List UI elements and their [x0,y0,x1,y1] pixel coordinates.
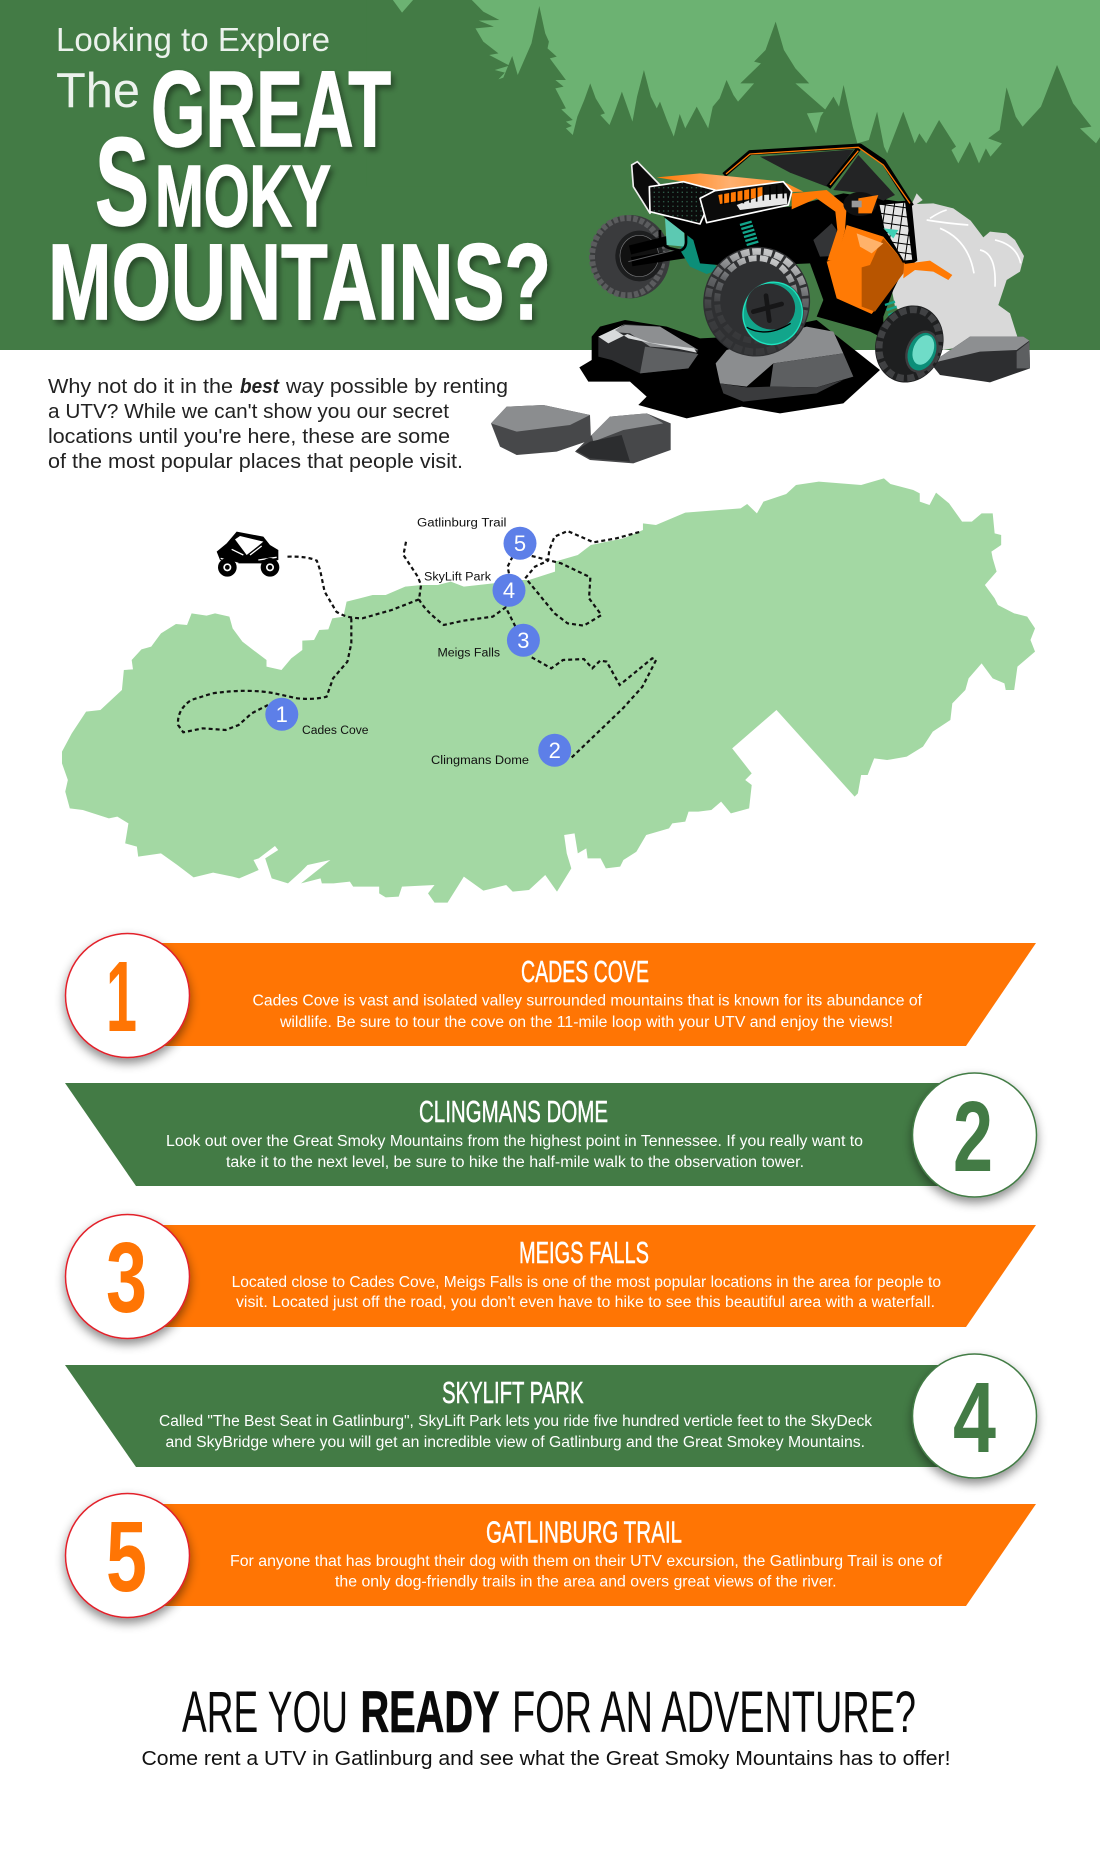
title kicker: Looking to Explore [56,21,330,58]
description [166,1133,863,1171]
intro paragraph: of the most popular places that people visit. [48,450,463,473]
map pin 1 [265,698,298,731]
center rock [716,327,853,402]
forest sky [392,0,1100,180]
title word: The: The [56,64,140,118]
description: For anyone that has brought their dog with them on their UTV excursion, the Gatlinburg Trail is one of [230,1553,943,1570]
cage mesh [878,202,913,262]
title main: MOUNTAINS? [48,221,551,342]
title [48,21,551,342]
panel: Gatlinburg Trail [66,1494,1036,1618]
intro paragraph: way possible by renting [285,375,508,398]
intro paragraph: best [240,375,280,398]
map label: Meigs Falls: Meigs Falls [438,648,500,660]
rear-left wheel [590,215,687,298]
map pin 5 [504,527,536,560]
orange door [827,225,905,314]
map pin 3 [507,624,540,657]
map pin 3: 3 [517,628,530,653]
left rock [598,324,698,373]
banner shape [150,1504,1036,1606]
number badge [912,1354,1036,1478]
banner shape [150,1225,1036,1327]
roll cage [724,146,912,206]
map label: SkyLift Park: SkyLift Park [424,572,491,584]
intro paragraph [48,375,508,473]
number badge [66,1214,190,1338]
forest tree silhouette [366,0,1100,187]
rock shadow [579,320,880,418]
number badge: 3 [106,1222,147,1334]
heading: CLINGMANS DOME [419,1094,608,1129]
title main [48,48,551,342]
panel: Clingmans Dome [65,1073,1036,1197]
number badge: 5 [106,1501,147,1613]
front coil spring [740,222,758,245]
panel: Cades Cove [66,934,1036,1058]
panel: Meigs Falls [66,1214,1036,1338]
number badge: 1 [106,941,137,1053]
description: wildlife. Be sure to tour the cove on the 11-mile loop with your UTV and enjoy the views! [279,1014,893,1031]
banner shape [65,1083,960,1186]
map of park [62,478,1035,903]
closing headline [182,1680,916,1745]
map label: Gatlinburg Trail: Gatlinburg Trail [417,518,506,530]
title main: S [95,113,149,252]
teal suspension [665,218,718,274]
rear coil spring [885,302,900,320]
number badge [912,1073,1036,1197]
description [232,1274,941,1311]
small rock left [491,405,591,455]
description: and SkyBridge where you will get an incredible view of Gatlinburg and the Great Smokey Mountains. [166,1434,865,1451]
header background [0,0,1100,350]
intro paragraph: a UTV? While we can't show you our secret [48,400,449,423]
map pin 2: 2 [549,738,561,763]
closing headline: ARE YOU [182,1680,348,1745]
closing subline: Come rent a UTV in Gatlinburg and see what the Great Smoky Mountains has to offer! [142,1747,950,1770]
description: Look out over the Great Smoky Mountains from the highest point in Tennessee. If you really want to [166,1133,863,1150]
description: the only dog-friendly trails in the area and overs great views of the river. [335,1574,836,1590]
description: visit. Located just off the road, you don't even have to hike to see this beautiful area with a waterfall. [236,1294,935,1311]
map pin 1: 1 [276,702,288,727]
number badge: 2 [953,1081,993,1193]
description: Located close to Cades Cove, Meigs Falls is one of the most popular locations in the area for people to [232,1274,941,1291]
hood [657,173,803,193]
right rock [931,337,1030,382]
description [230,1553,943,1590]
title main: GREAT [151,48,391,169]
number badge [66,1494,190,1618]
seat shadow [813,223,837,257]
map label: Cades Cove: Cades Cove [302,725,368,737]
small rock right [575,413,671,463]
rear fender [903,261,952,280]
map pin 2 [538,734,571,767]
description: take it to the next level, be sure to hike the half-mile walk to the observation tower. [226,1154,804,1171]
intro paragraph: locations until you're here, these are some [48,425,450,448]
description [159,1413,872,1451]
map pin 4 [492,574,526,607]
description: Cades Cove is vast and isolated valley surrounded mountains that is known for its abundance of [252,992,923,1010]
heading: SKYLIFT PARK [442,1375,584,1410]
banner shape [65,1365,960,1467]
closing headline: READY [360,1680,500,1745]
map pin 5: 5 [514,531,526,556]
banner shape [150,943,1036,1046]
panel: SkyLift Park [65,1354,1036,1478]
title main: MOKY [155,148,331,245]
orange fender frame [792,190,847,261]
icon: small UTV [217,532,279,577]
map label: Clingmans Dome: Clingmans Dome [431,755,529,767]
chassis body [663,193,917,338]
driver helmet [843,192,898,238]
rear-right wheel [864,295,955,393]
dashed trail routes [178,531,656,758]
description: Called "The Best Seat in Gatlinburg", SkyLift Park lets you ride five hundred verticle feet to the SkyDeck [159,1413,872,1430]
map pin 4: 4 [503,578,515,603]
number badge [66,934,190,1058]
heading: MEIGS FALLS [519,1235,649,1270]
UTV illustration on rocks [491,146,1030,463]
bull bar and grille [632,162,792,224]
number badge: 4 [953,1362,996,1474]
heading: GATLINBURG TRAIL [486,1514,682,1550]
heading: CADES COVE [521,954,649,989]
smoke cloud [890,193,1024,350]
bumper loop [660,223,686,251]
intro paragraph: Why not do it in the [48,375,233,398]
front wheel [691,235,822,369]
description [252,992,923,1031]
